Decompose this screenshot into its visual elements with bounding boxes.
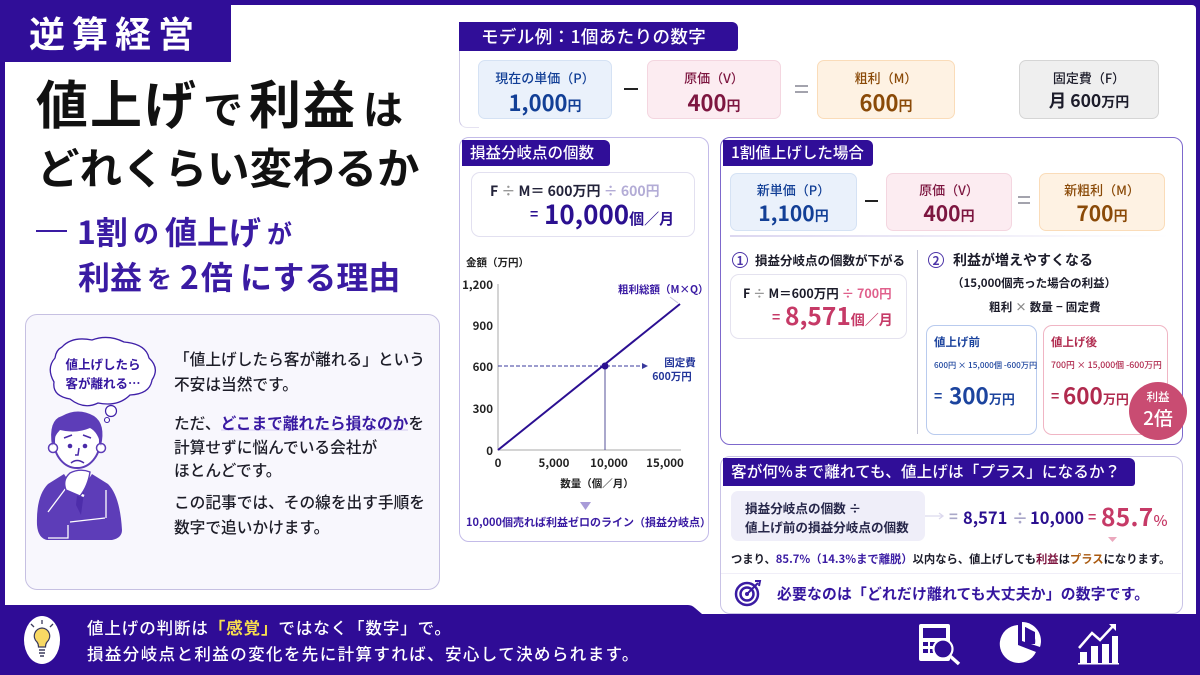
icon: worried businessman with thought bubble xyxy=(36,336,156,540)
box: after xyxy=(1043,325,1168,435)
card: cost xyxy=(886,173,1012,231)
card: margin: 600円 xyxy=(860,86,912,118)
churn calculation xyxy=(949,499,1168,534)
formula box: = xyxy=(530,204,538,224)
card: new price: 新単価（P） xyxy=(757,180,830,199)
formula box: 10,000個／月 xyxy=(544,195,674,232)
churn explanation: つまり、85.7%（14.3%まで離脱）以内なら、値上げしても利益はプラスになります。 xyxy=(731,551,1170,567)
minus xyxy=(865,200,878,202)
series tag xyxy=(0,0,231,62)
icon: pie chart xyxy=(1000,622,1041,663)
icon: rising bars xyxy=(1078,624,1119,664)
step 1 formula box: 8,571個／月 xyxy=(785,298,893,333)
subtitle: にする理由 xyxy=(240,253,400,299)
chart: break-even line xyxy=(462,255,708,510)
profit formula label: 粗利 × 数量 − 固定費 xyxy=(989,299,1101,315)
card: cost xyxy=(647,60,781,119)
minus xyxy=(624,88,638,90)
badge: profit doubled: 利益 xyxy=(1146,389,1170,405)
card: new margin: 700円 xyxy=(1076,198,1128,228)
badge: profit doubled: 2倍 xyxy=(1143,404,1173,431)
panel: worry xyxy=(25,314,440,590)
card: margin: 粗利（M） xyxy=(855,68,917,87)
subtitle: 値上げ xyxy=(165,208,261,254)
panel: churn tolerance xyxy=(720,456,1183,614)
chart: break-even line: 15,000 xyxy=(646,455,684,471)
card: cost: 400円 xyxy=(923,198,975,228)
icon: target xyxy=(734,580,762,606)
model tab: モデル例：1個あたりの数字 xyxy=(481,24,706,49)
chart: break-even line: 0 xyxy=(495,455,502,471)
worry text: ほとんどです。 xyxy=(174,458,281,481)
panel: 10% increase xyxy=(720,137,1183,445)
subtitle xyxy=(36,208,400,299)
card: cost: 400円 xyxy=(688,86,740,118)
title: 利益 xyxy=(249,64,357,139)
card: new margin xyxy=(1039,173,1165,231)
box: before: 値上げ前 xyxy=(934,334,980,350)
box: after: 値上げ後 xyxy=(1051,334,1097,350)
card: fixed cost xyxy=(1019,60,1159,119)
card: fixed cost: 固定費（F） xyxy=(1053,68,1125,87)
small arrow xyxy=(1108,537,1117,542)
churn calculation: 8,571 xyxy=(963,505,1007,529)
churn calculation: ÷ xyxy=(1012,505,1028,529)
chart: break-even line: 300 xyxy=(473,401,493,417)
icon: calculator with magnifier xyxy=(919,624,960,666)
card: current price: 現在の単価（P） xyxy=(495,68,595,87)
chart: break-even line: 900 xyxy=(473,318,493,334)
arrow xyxy=(925,512,944,520)
title: どれくらい変わるか xyxy=(37,136,420,197)
step 1 formula box: F ÷ M＝600万円 ÷ 700円 xyxy=(743,283,892,302)
formula box xyxy=(471,172,695,237)
chart: break-even line: 5,000 xyxy=(539,455,570,471)
chart: break-even line: 600 xyxy=(473,359,493,375)
title: は xyxy=(363,78,403,136)
model tab xyxy=(459,22,738,51)
subtitle: の xyxy=(133,214,159,251)
key message: 必要なのは「どれだけ離れても大丈夫か」の数字です。 xyxy=(777,583,1149,604)
subtitle: 2倍 xyxy=(180,253,235,299)
formula box: F ÷ M＝ 600万円 ÷ 600円 xyxy=(490,181,660,201)
step 1 formula box xyxy=(730,274,907,339)
card: current price: 1,000円 xyxy=(508,86,582,118)
chart: break-even line: 1,200 xyxy=(462,277,493,293)
chart: break-even line: 金額（万円） xyxy=(466,255,529,270)
takeaway text xyxy=(87,615,640,665)
box: before: 600円 × 15,000個 -600万円 xyxy=(934,359,1037,371)
divider xyxy=(721,573,1181,574)
worry text: この記事では、その線を出す手順を xyxy=(174,490,425,513)
equals xyxy=(795,85,808,93)
churn calculation: = xyxy=(949,506,958,527)
worry text: 計算せずに悩んでいる会社が xyxy=(174,435,377,458)
churn calculation: 85.7% xyxy=(1101,499,1168,534)
step 1 heading: 損益分岐点の個数が下がる xyxy=(755,250,905,269)
churn formula label: 値上げ前の損益分岐点の個数 xyxy=(745,517,909,536)
chart: break-even line: 0 xyxy=(486,443,493,459)
worry text: 不安は当然です。 xyxy=(174,372,298,395)
step 2 heading: （15,000個売った場合の利益） xyxy=(952,275,1116,291)
box: before: 300万円 xyxy=(949,379,1015,411)
icon: worried businessman with thought bubble: 客が離れる… xyxy=(65,373,141,392)
card: cost: 原価（V） xyxy=(684,68,744,87)
churn calculation: 10,000 xyxy=(1030,505,1084,529)
churn formula label xyxy=(731,491,925,541)
box: before xyxy=(926,325,1037,435)
panel: model frame xyxy=(459,51,479,128)
subtitle: 1割 xyxy=(77,208,128,254)
icon: worried businessman with thought bubble: 値上げしたら xyxy=(65,354,141,373)
chart: break-even line: 10,000 xyxy=(590,455,628,471)
title xyxy=(36,64,420,197)
badge: profit doubled xyxy=(1129,382,1187,440)
churn formula label: 損益分岐点の個数 ÷ xyxy=(745,498,861,517)
card: new price xyxy=(730,173,857,231)
divider band xyxy=(730,235,1170,237)
worry text: 「値上げしたら客が離れる」という xyxy=(174,347,425,370)
title: で xyxy=(203,78,243,136)
takeaway text: 損益分岐点と利益の変化を先に計算すれば、安心して決められます。 xyxy=(87,641,640,665)
chart: break-even line: 600万円 xyxy=(652,369,692,384)
vertical divider xyxy=(917,250,918,434)
chart: break-even line: 固定費 xyxy=(664,355,696,370)
card: new price: 1,100円 xyxy=(758,198,829,228)
churn calculation: = xyxy=(1088,507,1096,527)
worry text: ただ、どこまで離れたら損なのかを xyxy=(174,411,424,434)
step 1 heading: 1 xyxy=(736,252,744,269)
chart: break-even line: 数量（個／月） xyxy=(560,476,634,491)
takeaway text: 値上げの判断は「感覚」ではなく「数字」で。 xyxy=(87,615,452,639)
card: current price xyxy=(478,60,612,119)
increase tab: 1割値上げした場合 xyxy=(731,141,864,163)
worry text: 数字で追いかけます。 xyxy=(174,515,329,538)
subtitle: を xyxy=(147,260,172,296)
chart: break-even line: 粗利総額（M×Q） xyxy=(618,282,708,297)
card: new margin: 新粗利（M） xyxy=(1064,180,1140,199)
step 1 formula box: = xyxy=(772,307,780,327)
worry text xyxy=(174,347,425,538)
break-even tab: 損益分岐点の個数 xyxy=(470,141,594,163)
subtitle: が xyxy=(267,215,292,251)
step 2 heading xyxy=(928,250,1116,291)
bottom band shape xyxy=(5,605,702,614)
step 2 heading: 2 xyxy=(932,252,940,269)
box: after: 700円 × 15,000個 -600万円 xyxy=(1051,358,1162,371)
box: before: = xyxy=(934,386,942,406)
series tag: 逆算経営 xyxy=(29,6,201,58)
title: 値上げ xyxy=(36,64,198,139)
icon: light bulb xyxy=(24,616,60,664)
box: after: = xyxy=(1051,386,1059,406)
churn tab: 客が何%まで離れても、値上げは「プラス」になるか？ xyxy=(731,460,1120,482)
step 2 heading: 利益が増えやすくなる xyxy=(953,250,1093,270)
card: cost: 原価（V） xyxy=(919,180,979,199)
equals xyxy=(1018,196,1030,204)
box: after: 600万円 xyxy=(1063,379,1129,411)
panel: break-even xyxy=(459,137,709,542)
subtitle: 利益 xyxy=(78,253,142,299)
break-even conclusion: 10,000個売れば利益ゼロのライン（損益分岐点） xyxy=(466,514,711,530)
card: margin xyxy=(817,60,955,119)
card: fixed cost: 月 600万円 xyxy=(1049,88,1129,113)
